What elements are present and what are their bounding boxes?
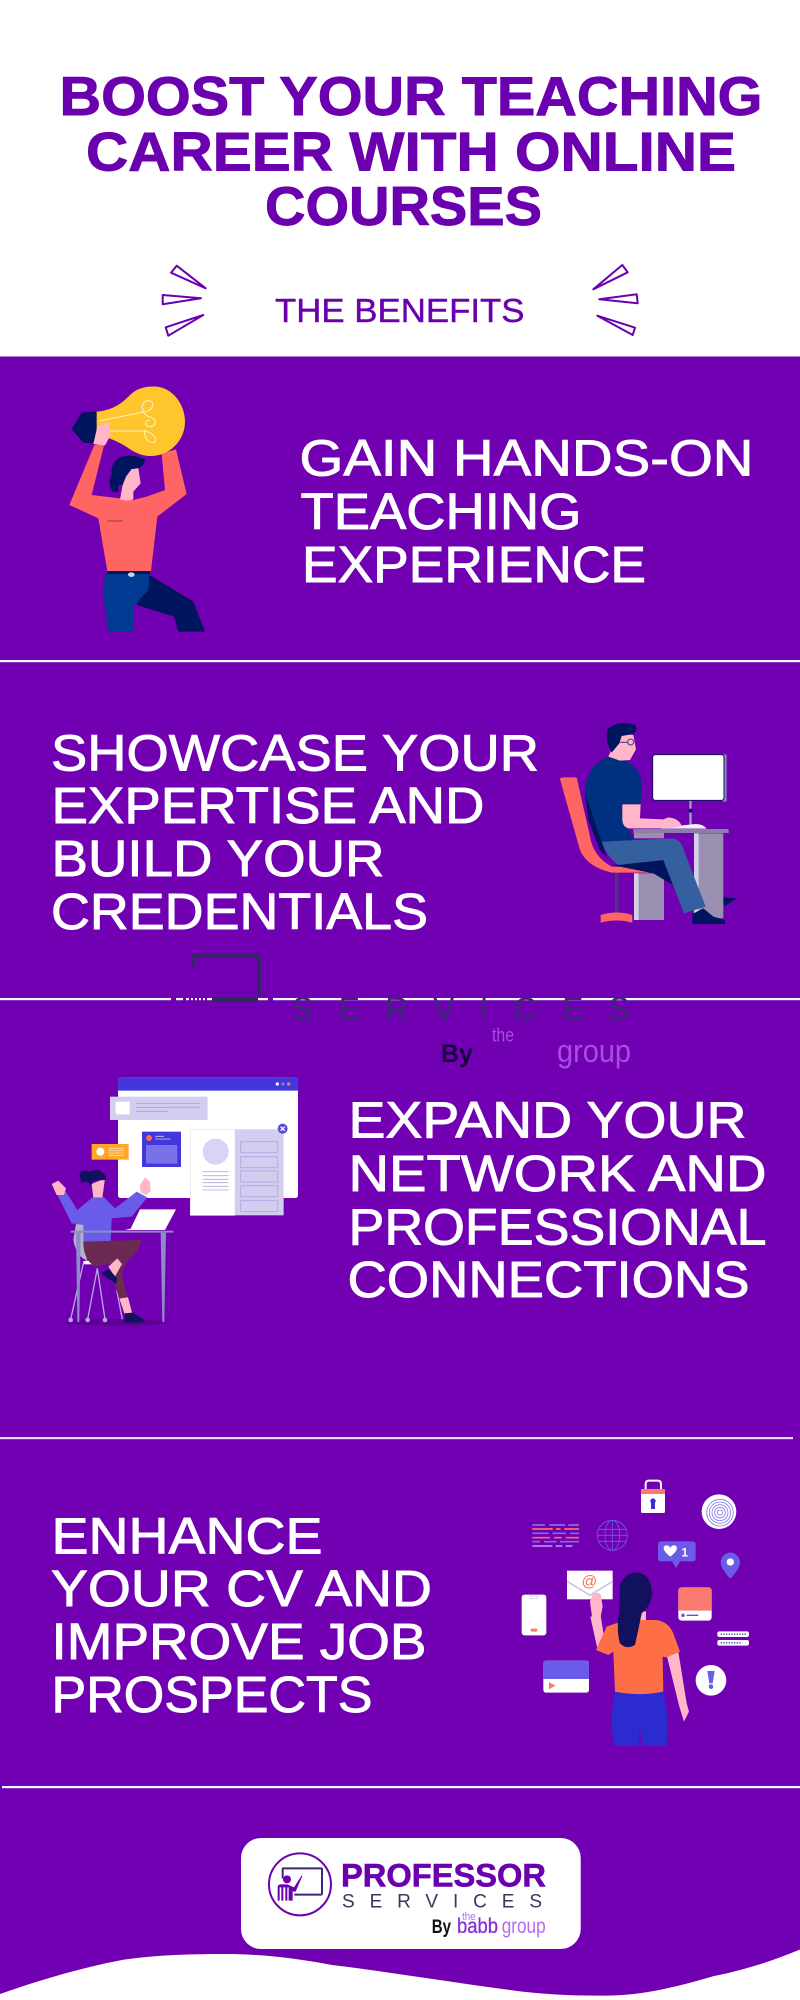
woman: neck and right arm [638, 1610, 646, 1622]
woman: arm and hand [590, 1616, 604, 1648]
text: expand your network: EXPAND YOUR [348, 1092, 746, 1148]
blue card [142, 1132, 181, 1167]
back leg [137, 575, 205, 632]
bulb cap [72, 411, 97, 443]
woman: hair [618, 1572, 652, 1647]
desk [634, 833, 664, 838]
illustration: woman surrounded by digital icons [522, 1481, 749, 1746]
title: COURSES [265, 175, 542, 237]
legs [83, 1240, 141, 1299]
torso [585, 757, 642, 842]
ghost logo: by the group [441, 1026, 631, 1069]
illustration: person lifting a light bulb [69, 386, 205, 632]
head [120, 467, 141, 500]
shirt and arms [69, 444, 187, 571]
logo wordmark: PROFESSOR [341, 1858, 546, 1894]
icon: fingerprint [702, 1494, 736, 1529]
logo byline: the [462, 1911, 476, 1923]
laptop [125, 1209, 176, 1230]
text: gain hands-on teaching experience: EXPERIENCE [302, 536, 646, 593]
ghost logo: gaps in divider [171, 997, 273, 1001]
icon: globe [597, 1520, 627, 1550]
logo byline: By [432, 1917, 451, 1938]
icon: envelope [567, 1571, 613, 1599]
ghost logo: by the group: the [492, 1026, 514, 1047]
icon: video card [543, 1661, 589, 1693]
text: showcase your expertise: SHOWCASE YOUR [51, 724, 539, 782]
ghost logo: laptop outline [193, 956, 259, 1000]
text: enhance your cv: PROSPECTS [52, 1666, 372, 1723]
arm [622, 804, 681, 828]
text: expand your network: NETWORK AND [348, 1145, 766, 1202]
front leg [103, 573, 149, 632]
chair [615, 872, 618, 913]
icon: alert [696, 1665, 726, 1696]
back leg and front leg [612, 860, 678, 888]
text: expand your network [348, 1092, 766, 1308]
title [60, 65, 762, 237]
logo byline [432, 1911, 546, 1938]
browser window [118, 1077, 298, 1198]
panel: logo card: SERVICES [342, 1892, 542, 1913]
profile card [190, 1129, 235, 1215]
logo byline: group [502, 1915, 546, 1938]
title: CAREER WITH ONLINE [86, 120, 736, 182]
ghost logo: by the group: group [557, 1033, 631, 1069]
torso and arms [57, 1192, 147, 1242]
woman: shirt [596, 1620, 680, 1694]
head [92, 1178, 105, 1197]
illustration: woman surrounded by digital icons: 1 [681, 1545, 688, 1559]
illustration: woman surrounded by digital icons: @ [582, 1574, 597, 1591]
icon: like bubble [658, 1541, 696, 1561]
text: gain hands-on teaching experience: TEACHING [300, 483, 582, 540]
icon: password fields [717, 1631, 749, 1637]
bulb [97, 386, 185, 456]
icon: phone [522, 1595, 546, 1635]
text: enhance your cv [51, 1508, 432, 1723]
text: showcase your expertise: BUILD YOUR [52, 830, 384, 887]
divider lines [0, 660, 800, 1788]
title: BOOST YOUR TEACHING [60, 65, 762, 127]
text: enhance your cv: IMPROVE JOB [52, 1613, 426, 1670]
monitor [723, 754, 727, 802]
icon: code lines [532, 1525, 579, 1546]
icon: map pin [721, 1553, 740, 1579]
ghost logo: by the group: By [441, 1040, 473, 1068]
hair [109, 456, 145, 492]
orange tag [92, 1144, 129, 1160]
icon: profile tile [678, 1587, 712, 1621]
text: showcase your expertise: CREDENTIALS [51, 883, 428, 940]
panel: logo card [241, 1838, 581, 1949]
chair [73, 1218, 95, 1264]
logo byline: babb [457, 1915, 498, 1938]
woman: trousers [612, 1692, 667, 1746]
illustration: man at a desktop computer [560, 723, 737, 924]
text: showcase your expertise [51, 724, 539, 940]
text: gain hands-on teaching experience: GAIN HANDS-ON [300, 430, 754, 486]
icon: right burst [593, 265, 638, 335]
floor shadow [64, 1319, 168, 1326]
text: expand your network: CONNECTIONS [348, 1251, 750, 1308]
icon: left burst [163, 266, 206, 336]
head and hair [608, 733, 636, 761]
desk [71, 1231, 173, 1233]
text: expand your network: PROFESSIONAL [348, 1199, 766, 1256]
text: gain hands-on teaching experience [300, 430, 754, 593]
icon: padlock [646, 1481, 661, 1490]
ghost logo: services: SERVICES [292, 991, 630, 1027]
subtitle: the benefits: THE BENEFITS [275, 292, 524, 329]
text: enhance your cv: ENHANCE [52, 1508, 322, 1565]
illustration: woman at laptop with browser windows [52, 1077, 298, 1326]
list card [110, 1097, 208, 1120]
belt [107, 571, 150, 574]
hands [52, 1181, 66, 1195]
hand [93, 422, 111, 445]
icon: professor logo [269, 1853, 331, 1915]
text: showcase your expertise: EXPERTISE AND [52, 777, 484, 834]
text: enhance your cv: YOUR CV AND [51, 1560, 432, 1617]
